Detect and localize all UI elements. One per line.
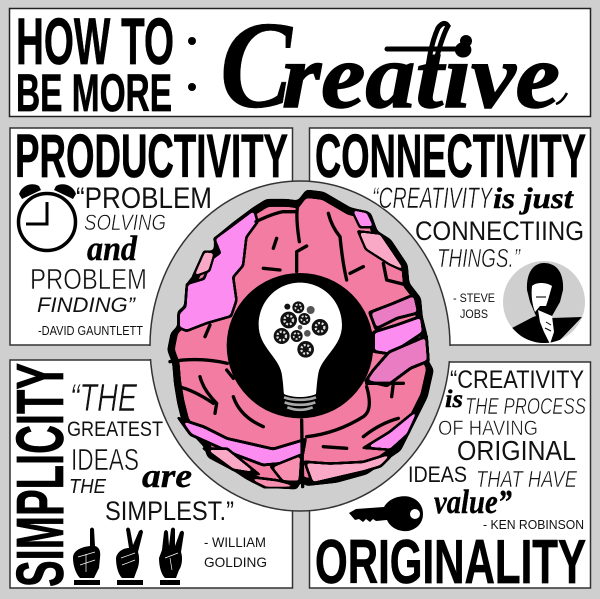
quote: connectivity: “CREATIVITY	[372, 182, 493, 215]
icon: one finger hand	[73, 528, 100, 585]
heading: productivity: PRODUCTIVITY	[15, 122, 288, 190]
title banner	[10, 0, 590, 135]
title: creative script: C	[220, 0, 293, 135]
quote: simplicity: GOLDING	[204, 554, 267, 570]
panel: connectivity background	[310, 128, 590, 345]
quote: productivity: PROBLEM	[30, 264, 147, 296]
quote: connectivity: JOBS	[460, 307, 488, 321]
brain pink base	[175, 198, 426, 481]
quote: productivity: and	[87, 229, 137, 268]
quote: simplicity	[67, 377, 267, 570]
icon: lightbulb	[259, 283, 342, 410]
quote: productivity: FINDING”	[37, 294, 136, 317]
quote: originality: IDEAS	[408, 462, 467, 487]
quote: originality: - KEN ROBINSON	[483, 517, 584, 532]
panel: originality content	[315, 366, 586, 597]
panel: productivity background	[10, 128, 292, 345]
panel: simplicity background	[10, 360, 292, 588]
quote: simplicity: SIMPLEST.”	[105, 496, 234, 526]
black circle behind bulb	[227, 273, 373, 418]
panel: simplicity content	[3, 363, 267, 587]
panel: connectivity content	[315, 122, 586, 345]
quote: connectivity: THINGS.”	[437, 243, 521, 273]
icon: three fingers hand	[159, 528, 184, 585]
title dots	[188, 37, 196, 91]
quote: originality	[408, 366, 586, 532]
quote: simplicity: IDEAS	[71, 442, 139, 477]
quote: productivity: “PROBLEM	[76, 182, 212, 215]
brain coloured lobes	[180, 211, 427, 487]
brain with lightbulb	[168, 191, 433, 488]
quote: connectivity: is just	[493, 182, 575, 215]
quote: productivity: SOLVING	[84, 210, 166, 235]
icon: two fingers hand	[116, 528, 143, 585]
quote: simplicity: THE	[69, 476, 107, 498]
quote: originality: “CREATIVITY	[450, 366, 584, 394]
title: creative script: reative	[282, 25, 560, 127]
heading: simplicity: SIMPLICITY	[3, 363, 78, 587]
panel: originality background	[310, 362, 590, 588]
quote: productivity: -DAVID GAUNTLETT	[38, 323, 143, 338]
quote: connectivity: CONNECTIING	[415, 216, 584, 246]
panel: productivity content	[15, 122, 288, 338]
quote: connectivity	[372, 182, 584, 321]
central grey ellipse	[150, 181, 450, 511]
quote: simplicity: “THE	[70, 377, 138, 420]
quote: simplicity: - WILLIAM	[204, 534, 266, 550]
quote: originality: value”	[434, 484, 512, 521]
icon: key	[349, 496, 423, 531]
title: how to: HOW TO	[16, 4, 174, 78]
quote: originality: is	[445, 386, 463, 413]
brain silhouette	[168, 191, 433, 488]
icon: alarm clock	[18, 184, 76, 250]
quote: originality: ORIGINAL	[457, 435, 576, 466]
quote: simplicity: GREATEST	[67, 418, 163, 441]
quote: originality: THAT HAVE	[476, 466, 578, 492]
quote: connectivity: - STEVE	[453, 291, 495, 305]
brain fold lines	[170, 203, 407, 487]
icon: gears in bulb	[274, 301, 328, 358]
title: be more: BE MORE	[16, 64, 172, 123]
quote: productivity	[30, 182, 212, 338]
title: creative script	[220, 0, 567, 135]
quote: simplicity: are	[142, 458, 192, 495]
icon: portrait of steve jobs	[503, 261, 585, 345]
quote: originality: OF HAVING	[438, 417, 538, 440]
